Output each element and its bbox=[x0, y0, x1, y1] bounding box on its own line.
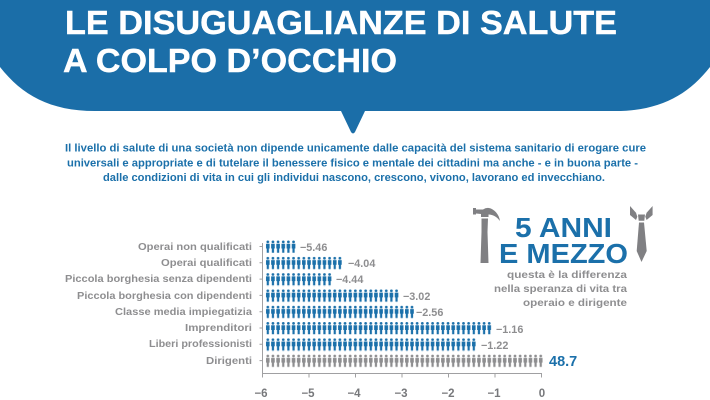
intro text bbox=[65, 142, 646, 184]
icon: necktie bbox=[630, 206, 653, 262]
category labels: Piccola borghesia senza dipendenti bbox=[65, 274, 252, 285]
callout caption: questa è la differenza bbox=[507, 269, 627, 281]
x axis labels: −4 bbox=[347, 388, 361, 400]
category labels bbox=[65, 242, 252, 367]
value labels: −4.04 bbox=[348, 258, 375, 270]
category labels: Liberi professionisti bbox=[149, 339, 252, 350]
category labels: Dirigenti bbox=[206, 356, 252, 367]
header speech bubble bbox=[0, 0, 710, 134]
value labels: −1.22 bbox=[481, 340, 508, 352]
chart: life expectancy by social class bbox=[65, 240, 577, 400]
intro text: Il livello di salute di una società non dipende unicamente dalle capacità del sistema sanitario di erogare cure bbox=[65, 142, 646, 154]
x axis labels: −5 bbox=[301, 388, 315, 400]
callout caption: nella speranza di vita tra bbox=[494, 283, 627, 295]
x axis labels: −1 bbox=[487, 388, 501, 400]
title: A COLPO D’OCCHIO bbox=[63, 42, 397, 79]
callout caption: operaio e dirigente bbox=[523, 297, 627, 309]
callout caption bbox=[494, 269, 627, 309]
value labels: −4.44 bbox=[336, 274, 363, 286]
pictogram rows bbox=[266, 240, 544, 368]
x axis labels: −3 bbox=[394, 388, 408, 400]
title bbox=[63, 4, 617, 79]
category labels: Operai qualificati bbox=[161, 258, 252, 269]
axes bbox=[260, 243, 542, 378]
value labels: −2.56 bbox=[416, 307, 443, 319]
title: LE DISUGUAGLIANZE DI SALUTE bbox=[65, 4, 617, 41]
category labels: Piccola borghesia con dipendenti bbox=[77, 291, 252, 302]
callout: 5 anni e mezzo: E MEZZO bbox=[499, 238, 628, 269]
x axis labels bbox=[254, 388, 545, 400]
value labels: −1.16 bbox=[496, 324, 523, 336]
icon: hammer bbox=[473, 208, 500, 263]
category labels: Classe media impiegatizia bbox=[115, 307, 252, 318]
intro text: dalle condizioni di vita in cui gli individui nascono, crescono, vivono, lavorano ed invecchiano. bbox=[103, 172, 605, 184]
category labels: Imprenditori bbox=[185, 323, 252, 334]
value labels bbox=[300, 242, 523, 352]
x axis labels: −6 bbox=[254, 388, 268, 400]
x axis labels: 0 bbox=[539, 388, 545, 400]
highlighted value: 48.7 bbox=[549, 354, 577, 370]
value labels: −5.46 bbox=[300, 242, 327, 254]
intro text: universali e appropriate e di tutelare il benessere fisico e mentale dei cittadini ma anche - e in buona parte - bbox=[67, 158, 638, 170]
callout: 5 anni e mezzo: 5 ANNI bbox=[515, 212, 612, 243]
callout: 5 anni e mezzo bbox=[499, 212, 628, 269]
x axis labels: −2 bbox=[441, 388, 455, 400]
category labels: Operai non qualificati bbox=[138, 242, 252, 253]
value labels: −3.02 bbox=[403, 291, 430, 303]
